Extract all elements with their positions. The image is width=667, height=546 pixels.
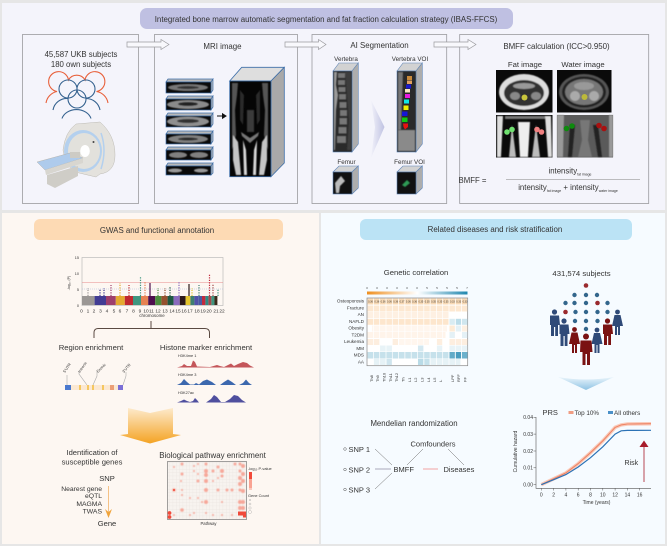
heading: region enrichment: Region enrichment [59, 343, 124, 352]
chart: PRS cumulative hazard: 8 [589, 492, 592, 498]
chart: Manhattan plot: 11 [149, 308, 154, 314]
panel: GWAS and functional annotation [2, 213, 319, 544]
image: femur VOI volume [397, 166, 422, 194]
bracket connector [94, 321, 210, 338]
chart: Manhattan plot: 0 [80, 308, 83, 314]
formula: BMFF: BMFF = [459, 176, 487, 185]
arrow: segmentation to calculation [434, 40, 476, 50]
diagram: Mendelian randomization: SNP 2 [348, 466, 370, 474]
chart: Manhattan plot: 9 [139, 308, 142, 314]
heading: IBAS-FFCS [140, 8, 513, 29]
chart: PRS cumulative hazard: 10 [600, 492, 606, 498]
chart: region enrichment: Exonic [96, 363, 107, 374]
chart: pathway bubble matrix [168, 462, 246, 520]
chart: Manhattan plot: chromosome [139, 313, 165, 318]
image: vertebra volume [333, 63, 358, 152]
arrow: risk: Risk [624, 460, 639, 467]
chart: region enrichment: 5'UTR [63, 362, 72, 374]
panel: AI segmentation [312, 34, 447, 204]
chart: genetic correlation heatmap: 0.35 [418, 300, 424, 304]
chart: Manhattan plot: 2 [93, 308, 96, 314]
chart: genetic correlation heatmap: Th12 [394, 372, 399, 382]
chart: genetic correlation heatmap: 0.35 [444, 300, 449, 304]
chart: genetic correlation heatmap: 5 [436, 286, 438, 290]
formula: BMFF [459, 166, 640, 193]
chart: genetic correlation heatmap: LPF [450, 374, 455, 382]
chart: Manhattan plot: -log₁₀ (P) [67, 276, 71, 290]
heatmap row: osteoporosis [368, 298, 467, 304]
chart: Manhattan plot: 3 [99, 308, 102, 314]
heading: identification of susceptible genes: Identification of [66, 448, 118, 457]
icon: chevron [371, 100, 384, 158]
icon: person man left 2 [560, 318, 570, 346]
chart: PRS cumulative hazard: 0.01 [523, 466, 533, 472]
heatmap row: AA [374, 359, 460, 365]
chart: region enrichment [63, 361, 132, 390]
heatmap row: T2DM [368, 332, 468, 338]
formula: BMFF: intensity [518, 183, 547, 192]
chart: PRS cumulative hazard: 0.04 [523, 415, 533, 421]
heading: histone marker enrichment: Histone marker enrichment [160, 343, 253, 352]
chart: genetic correlation heatmap: AN [358, 312, 364, 317]
diagram: SNP to gene: Nearest gene [61, 486, 102, 493]
chart: genetic correlation heatmap: NAFLD [349, 319, 365, 324]
legend: bubble matrix: Gene Count [248, 493, 270, 498]
icon: people group [46, 72, 108, 118]
chart: histone marker tracks [177, 353, 254, 402]
image: water axial [557, 70, 612, 112]
chart: genetic correlation heatmap: FF [462, 377, 468, 382]
chart: PRS cumulative hazard: 0.00 [523, 482, 533, 488]
panel: BMFF calculation: Fat image [508, 60, 542, 69]
chart: genetic correlation heatmap: 0 [386, 286, 388, 290]
heading: GWAS: GWAS and functional annotation [100, 226, 214, 235]
chart: genetic correlation heatmap: L5 [432, 377, 437, 382]
chart: genetic correlation heatmap: Fracture [347, 306, 364, 310]
formula: BMFF: + intensity [561, 183, 599, 192]
chart: genetic correlation heatmap: 0.37 [400, 300, 405, 304]
chart: genetic correlation heatmap: T2DM [351, 332, 364, 338]
panel: subjects: 180 own subjects [51, 60, 111, 69]
chart: genetic correlation heatmap: 0.36 [368, 300, 374, 304]
chart: Manhattan plot: 7 [126, 308, 129, 314]
chart: PRS cumulative hazard: 0.02 [523, 449, 533, 455]
chart: region enrichment: 3'UTR [122, 363, 132, 374]
heatmap row: NAFLD [368, 319, 468, 325]
diagram: SNP to gene: MAGMA [76, 501, 102, 508]
chart: genetic correlation heatmap: 7 [466, 286, 468, 290]
panel: AI segmentation: AI Segmentation [350, 41, 409, 50]
chart: genetic correlation heatmap: 0.36 [406, 300, 411, 304]
panel: MRI image [154, 34, 298, 204]
chart: Manhattan plot: 21 [213, 308, 219, 314]
chart: genetic correlation heatmap: 0.33 [456, 300, 462, 304]
arrow: blue chevron [558, 377, 614, 390]
icon: person man left [550, 309, 560, 336]
heading: GWAS [34, 219, 283, 240]
diagram: SNP to gene: Gene [98, 519, 116, 528]
chart: genetic correlation heatmap: 0 [396, 286, 398, 290]
chart: PRS cumulative hazard: 6 [577, 492, 580, 498]
legend: PRS [542, 408, 640, 417]
panel: AI segmentation: Vertebra VOI [392, 56, 428, 63]
chart: genetic correlation heatmap: MDS [354, 352, 364, 358]
axis label: pathway: Pathway [200, 521, 217, 526]
chart: genetic correlation heatmap: Th8 [369, 374, 374, 382]
chart: Manhattan plot: 6 [119, 308, 122, 314]
chart: histone marker tracks: H3K4me 3 [178, 372, 196, 377]
icon: MRI scanner [37, 122, 115, 188]
chart: Manhattan plot: 10 [143, 308, 149, 314]
chart: Manhattan plot: 13 [162, 308, 168, 314]
panel: subjects [22, 34, 138, 204]
chart: genetic correlation heatmap: 0.33 [463, 300, 468, 304]
legend: bubble matrix [248, 466, 272, 514]
chart: Manhattan plot: 5 [113, 308, 116, 314]
chart: PRS cumulative hazard: 16 [637, 492, 643, 498]
heading: identification of susceptible genes [62, 448, 123, 466]
chart: Manhattan plot: 17 [187, 308, 193, 314]
chart: Manhattan plot: 0 [77, 304, 79, 308]
chart: Manhattan plot: 18 [194, 308, 200, 314]
chart: genetic correlation heatmap: Leukemia [344, 339, 364, 344]
chart: genetic correlation heatmap: MM [356, 346, 364, 351]
chart: Manhattan plot: 20 [206, 308, 212, 314]
chart: Manhattan plot: 19 [200, 308, 206, 314]
chart: genetic correlation heatmap: 0.36 [412, 300, 418, 304]
chart: genetic correlation heatmap: L [438, 379, 443, 382]
heatmap row: MM [380, 346, 467, 352]
formula: BMFF: water image [599, 189, 618, 193]
chart: PRS cumulative hazard: Time (years) [583, 500, 611, 506]
formula: BMFF: intensity [548, 166, 577, 176]
chart: genetic correlation heatmap: 0.36 [387, 300, 392, 304]
heatmap row: fracture [368, 306, 467, 312]
arrow: slices to volume [217, 114, 226, 118]
chart: genetic correlation heatmap: RFF [456, 374, 461, 382]
chart: genetic correlation heatmap: L2 [413, 377, 418, 382]
chart: genetic correlation heatmap: Th [400, 377, 406, 382]
chart: genetic correlation heatmap: 0.35 [425, 300, 430, 304]
chart: Manhattan plot: 15 [75, 256, 79, 260]
heatmap row: MDS [368, 352, 468, 358]
chart: Manhattan plot: 12 [155, 308, 161, 314]
chart: genetic correlation heatmap: 5 [426, 286, 428, 290]
chart: genetic correlation heatmap: 0.36 [374, 300, 380, 304]
chart: genetic correlation heatmap: Obesity [348, 326, 365, 330]
chart: genetic correlation heatmap: L3 [420, 377, 424, 382]
panel: related diseases and risk stratification [321, 213, 665, 544]
chart: genetic correlation heatmap: 0.35 [437, 300, 443, 304]
chart: PRS cumulative hazard: 0 [540, 492, 543, 498]
heading: IBAS-FFCS: Integrated bone marrow automatic segmentation and fat fraction calculation strategy (IBAS-FFCS) [155, 15, 498, 24]
icon: population [550, 283, 623, 365]
heatmap row: leukemia [368, 339, 467, 345]
chart: genetic correlation heatmap: 0 [416, 286, 418, 290]
image: axial slices [166, 79, 213, 175]
chart: PRS cumulative hazard: 14 [625, 492, 630, 498]
heatmap row: AN [368, 312, 448, 318]
image: coronal MRI volume [230, 67, 284, 177]
heading: subject count: 431,574 subjects [552, 269, 611, 278]
legend: bubble matrix: -log₁₀ P-value [248, 466, 272, 471]
icon: person woman centre right [592, 328, 602, 353]
chart: Manhattan plot: 5 [77, 288, 79, 292]
heading: Mendelian randomization: Mendelian randomization [370, 419, 458, 428]
chart: genetic correlation heatmap: Th11 [388, 372, 393, 382]
chart: PRS cumulative hazard: 4 [565, 492, 568, 498]
chart: PRS cumulative hazard [513, 408, 651, 506]
chart: histone marker tracks: H3K27ac [178, 390, 194, 395]
chart: histone marker tracks: H3K4me 1 [178, 353, 196, 358]
arrow: subjects to MRI [127, 40, 169, 50]
legend: PRS: All others [614, 410, 640, 417]
chart: PRS cumulative hazard: Cumulative hazard [513, 430, 519, 472]
panel: subjects: 45,587 UKB subjects [45, 50, 118, 59]
chart: Manhattan plot: 8 [132, 308, 135, 314]
image: femur volume [333, 166, 358, 194]
panel: BMFF calculation [459, 34, 649, 204]
chart: Manhattan plot: 16 [181, 308, 187, 314]
diagram: SNP to gene [61, 474, 116, 528]
chart: genetic correlation heatmap: 0 [376, 286, 378, 290]
chart: genetic correlation heatmap: 0.36 [381, 300, 386, 304]
arrow: MRI to segmentation [285, 40, 326, 50]
heading: related diseases: Related diseases and risk stratification [428, 225, 562, 234]
formula: BMFF: fat image [577, 172, 592, 176]
icon: person woman red [569, 327, 580, 353]
chart: genetic correlation heatmap: 5 [456, 286, 458, 290]
diagram: Mendelian randomization: BMFF [394, 465, 414, 474]
image: fat axial [496, 70, 552, 112]
panel: AI segmentation: Vertebra [334, 56, 358, 63]
chart: genetic correlation heatmap [337, 286, 468, 382]
chart: region enrichment: Intronic [78, 361, 88, 374]
chart: PRS cumulative hazard: 0.03 [523, 432, 533, 438]
legend: PRS: PRS [542, 408, 558, 417]
diagram: Mendelian randomization: Diseases [444, 465, 475, 474]
chart: genetic correlation heatmap: Osteoporosis [337, 298, 365, 304]
chart: genetic correlation heatmap: L1 [407, 377, 412, 382]
chart: genetic correlation heatmap: Th10 [382, 372, 386, 382]
heading: related diseases [360, 219, 632, 240]
chart: Manhattan plot: 22 [219, 308, 225, 314]
formula: BMFF: fat image [547, 189, 561, 193]
panel: BMFF calculation: Water image [561, 60, 605, 69]
icon: person man red large [580, 334, 592, 365]
icon: person man red [603, 318, 613, 345]
chart: genetic correlation heatmap: 0.35 [431, 300, 437, 304]
panel: AI segmentation: Femur VOI [394, 159, 425, 166]
chart: genetic correlation heatmap: Th9 [375, 374, 380, 382]
arrow: orange chevron [120, 408, 181, 444]
diagram: Mendelian randomization [344, 440, 475, 494]
heading: genetic correlation: Genetic correlation [384, 268, 448, 277]
panel: MRI image: MRI image [203, 42, 242, 51]
chart: genetic correlation heatmap: AA [358, 360, 365, 364]
icon: person woman right [612, 310, 623, 335]
heatmap row: obesity [372, 326, 468, 332]
image: fat coronal [496, 115, 552, 158]
chart: genetic correlation heatmap: 0.33 [450, 300, 455, 304]
panel: AI segmentation: Femur [337, 159, 356, 166]
heading: identification of susceptible genes: susceptible genes [62, 458, 123, 466]
heading: biological pathway enrichment: Biological pathway enrichment [159, 451, 267, 460]
panel: segmentation strategy [2, 3, 665, 210]
chart: PRS cumulative hazard: 2 [552, 492, 555, 498]
panel: BMFF calculation: BMFF calculation (ICC>0.950) [503, 42, 610, 51]
diagram: SNP to gene: SNP [99, 474, 115, 483]
legend: PRS: Top 10% [574, 410, 599, 417]
chart: Manhattan plot [67, 256, 225, 318]
chart: genetic correlation heatmap: 0 [366, 286, 368, 290]
chart: genetic correlation heatmap: 0 [406, 286, 408, 290]
diagram: Mendelian randomization: SNP 3 [348, 486, 370, 494]
image: water coronal [557, 115, 613, 158]
chart: genetic correlation heatmap: 5 [446, 286, 448, 290]
diagram: SNP to gene: eQTL [85, 493, 102, 500]
diagram: Mendelian randomization: Comfounders [410, 440, 456, 448]
chart: PRS cumulative hazard: 12 [612, 492, 618, 498]
chart: genetic correlation heatmap: 0.36 [393, 300, 399, 304]
chart: Manhattan plot: 4 [106, 308, 109, 314]
chart: Manhattan plot: 10 [75, 272, 79, 276]
chart: genetic correlation heatmap: L4 [426, 377, 431, 382]
diagram: SNP to gene: TWAS [83, 508, 102, 516]
chart: Manhattan plot: 1 [87, 308, 90, 314]
image: vertebra VOI volume [397, 63, 422, 152]
chart: Manhattan plot: 15 [175, 308, 181, 314]
chart: Manhattan plot: 14 [169, 308, 175, 314]
diagram: Mendelian randomization: SNP 1 [348, 445, 370, 454]
